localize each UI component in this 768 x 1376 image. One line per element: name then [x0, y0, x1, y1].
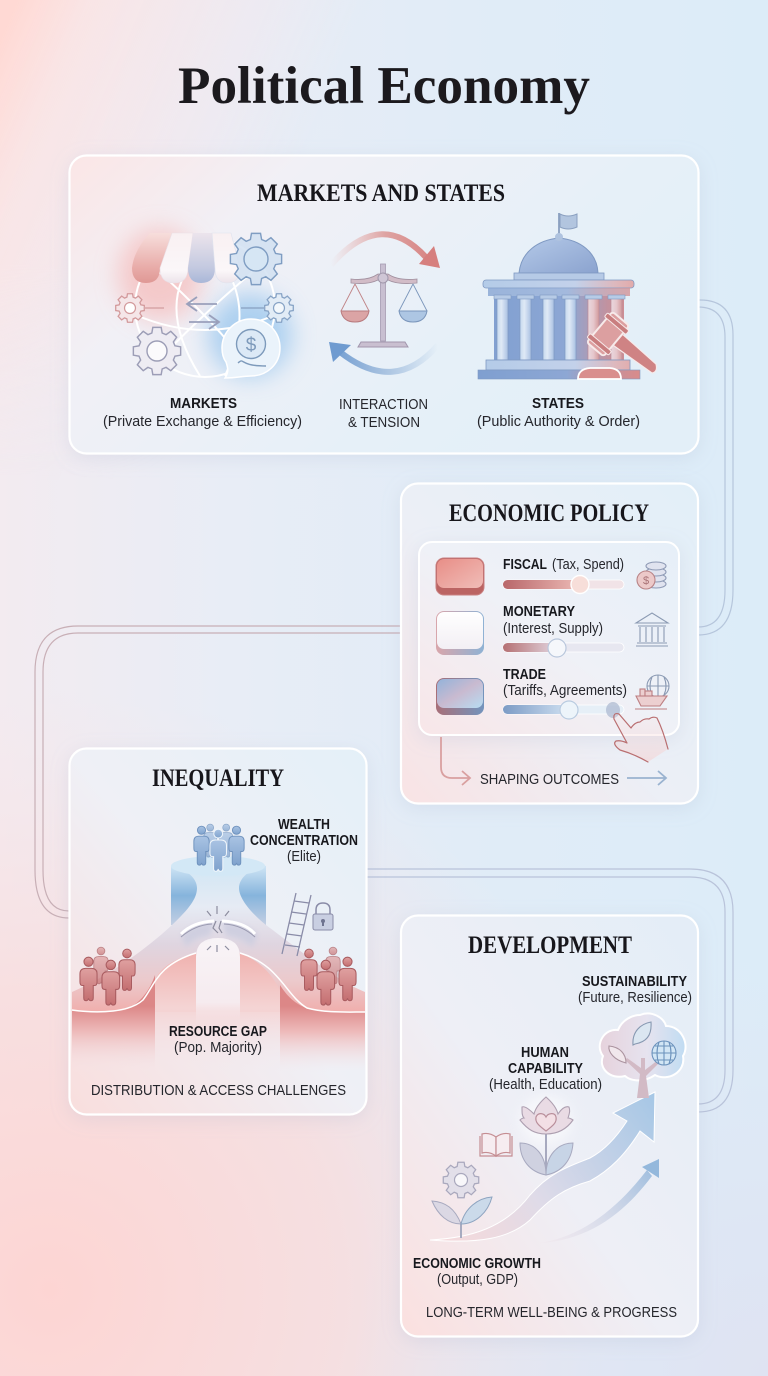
icon: cargo ship and globe	[635, 675, 669, 709]
icon: balance scale with cycle arrows	[329, 234, 440, 372]
label: interaction and tension	[339, 397, 428, 431]
arrow: big growth	[430, 1092, 655, 1241]
label: resource gap	[169, 1024, 267, 1056]
label: resource gap: (Pop. Majority)	[174, 1040, 262, 1056]
icon: coins	[637, 562, 666, 589]
label: human capability: HUMAN	[521, 1045, 569, 1061]
label: shaping outcomes: SHAPING OUTCOMES	[480, 772, 619, 788]
icon: gear and sprout	[432, 1162, 492, 1238]
caption: long-term well-being: LONG-TERM WELL-BEING & PROGRESS	[426, 1305, 677, 1321]
panel: inequality	[70, 748, 366, 1114]
fiscal control: (Tax, Spend)	[552, 557, 624, 573]
label: markets: MARKETS	[170, 396, 237, 412]
icon: open book	[480, 1133, 512, 1156]
label: markets	[103, 396, 302, 430]
connector: markets to economic policy	[698, 300, 733, 635]
icon: bank	[636, 613, 668, 646]
trade control: (Tariffs, Agreements)	[503, 683, 627, 699]
label: economic growth: (Output, GDP)	[437, 1272, 518, 1288]
label: interaction and tension: INTERACTION	[339, 397, 428, 413]
icon: coins: $	[643, 575, 649, 587]
heading: economic policy: ECONOMIC POLICY	[449, 500, 649, 527]
label: sustainability: SUSTAINABILITY	[582, 974, 687, 990]
label: wealth concentration: WEALTH	[278, 817, 330, 833]
icon: elite people	[194, 824, 244, 871]
icon: padlock	[313, 903, 333, 930]
label: human capability: (Health, Education)	[489, 1077, 602, 1093]
label: wealth concentration: (Elite)	[287, 849, 321, 865]
label: states	[477, 396, 640, 430]
icon: market storefront and globe: $	[246, 335, 257, 356]
label: wealth concentration: CONCENTRATION	[250, 833, 358, 849]
fiscal control: FISCAL	[503, 557, 547, 573]
panel: development	[401, 916, 698, 1336]
connector: inequality to development	[367, 869, 733, 1112]
panel: markets and states	[70, 156, 698, 454]
arrow: blue	[627, 771, 666, 785]
trade control: TRADE	[503, 667, 546, 683]
label: states: (Public Authority & Order)	[477, 414, 640, 430]
chart: resource landscape	[72, 824, 365, 1072]
monetary control	[436, 604, 624, 657]
label: human capability	[489, 1045, 602, 1093]
heading: development: DEVELOPMENT	[468, 932, 632, 959]
label: interaction and tension: & TENSION	[348, 415, 420, 431]
label: sustainability	[578, 974, 692, 1006]
label: sustainability: (Future, Resilience)	[578, 990, 692, 1006]
title: Political Economy	[178, 57, 590, 115]
label: resource gap: RESOURCE GAP	[169, 1024, 267, 1040]
monetary control: (Interest, Supply)	[503, 621, 603, 637]
arrow: small growth	[540, 1159, 659, 1243]
label: markets: (Private Exchange & Efficiency)	[103, 414, 302, 430]
monetary control: MONETARY	[503, 604, 575, 620]
icon: pointing hand	[614, 714, 668, 762]
icon: right majority people	[301, 947, 356, 1005]
label: human capability: CAPABILITY	[508, 1061, 583, 1077]
connector: economic policy to inequality	[35, 626, 401, 918]
heading: markets and states: MARKETS AND STATES	[257, 180, 505, 207]
control board	[419, 542, 679, 735]
icon: flower with heart	[520, 1096, 573, 1175]
arrow: pink elbow	[441, 737, 470, 785]
label: economic growth	[413, 1256, 541, 1288]
icon: state building with gavel	[478, 213, 656, 379]
trade control	[436, 667, 627, 719]
icon: left majority people	[80, 947, 135, 1005]
label: wealth concentration	[250, 817, 358, 865]
icon: sustainability tree	[600, 1013, 686, 1098]
icon: ladder	[282, 893, 311, 956]
heading: inequality: INEQUALITY	[152, 765, 284, 792]
fiscal control	[436, 557, 624, 595]
broken arc crack	[181, 906, 258, 952]
label: states: STATES	[532, 396, 584, 412]
caption: distribution and access: DISTRIBUTION & ACCESS CHALLENGES	[91, 1083, 346, 1099]
label: economic growth: ECONOMIC GROWTH	[413, 1256, 541, 1272]
icon: market storefront and globe	[116, 229, 293, 378]
panel: economic policy	[401, 484, 698, 804]
